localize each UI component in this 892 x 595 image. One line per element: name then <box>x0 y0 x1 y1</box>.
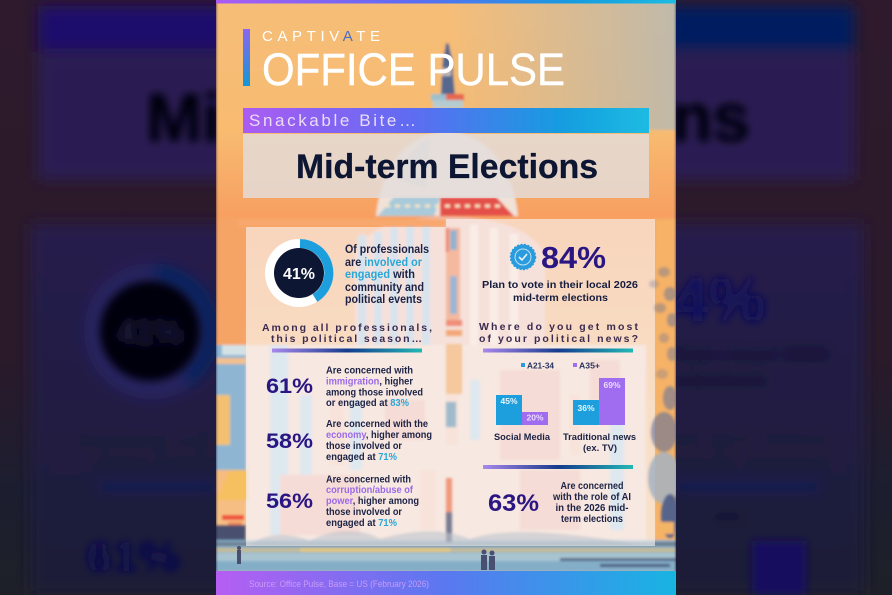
blurred dark backdrop: Mid-term Elections <box>146 80 750 156</box>
title box <box>243 134 649 198</box>
stat 56% corruption: corruption/abuse of <box>326 485 414 496</box>
stat 63% AI: in the 2026 mid- <box>556 503 628 514</box>
translucent content panel <box>246 219 655 546</box>
bar chart: political news sources <box>494 378 636 454</box>
stat 58% economy <box>266 419 432 463</box>
poster <box>216 0 680 595</box>
tree <box>648 267 680 538</box>
stat 58% economy: those involved or <box>326 441 402 452</box>
snackable banner <box>243 108 649 133</box>
stat 56% corruption: power, higher among <box>326 496 419 507</box>
left side building <box>216 345 246 470</box>
divider left <box>272 348 422 352</box>
stat 56% corruption: 56% <box>266 490 313 513</box>
stat 63% AI: Are concerned <box>560 481 624 492</box>
logo <box>243 29 564 86</box>
blurred dark backdrop: 41% <box>118 314 182 350</box>
stat 84% vote: mid-term elections <box>513 292 608 304</box>
footer band <box>216 571 676 595</box>
social media bars <box>496 395 548 425</box>
divider lower right <box>483 465 633 469</box>
traditional news bars: 36% <box>577 403 595 413</box>
lower dome colonnade <box>355 217 545 345</box>
stat 58% economy: 58% <box>266 430 313 453</box>
involved or engaged text: Of professionals <box>345 244 429 256</box>
heading: political news <box>479 322 638 344</box>
involved or engaged text <box>345 244 429 306</box>
chart legend: A21-34 <box>527 362 555 370</box>
main lower building <box>246 345 646 545</box>
chart category labels <box>494 434 636 453</box>
involved or engaged text: political events <box>345 294 422 306</box>
stat 61% immigration <box>266 366 423 409</box>
stat 61% immigration: among those involved <box>326 388 423 398</box>
dome drum bands <box>378 197 514 216</box>
stat 56% corruption: engaged at 71% <box>326 518 397 529</box>
stat 58% economy: Are concerned with the <box>326 419 428 430</box>
people silhouettes <box>237 546 495 570</box>
chart legend: A35+ <box>579 362 600 370</box>
blurred dark backdrop: this political season… <box>96 451 398 474</box>
involved or engaged text: engaged with <box>345 269 415 281</box>
blurred dark backdrop: mid-term elections <box>580 369 770 392</box>
blurred dark backdrop: 61% <box>86 533 180 580</box>
stat 61% immigration: 61% <box>266 375 313 398</box>
heading: among all professionals: Among all professionals, <box>262 322 432 334</box>
stat 56% corruption: those involved or <box>326 507 402 518</box>
stat 63% AI: 63% <box>488 490 539 517</box>
stat 56% corruption <box>266 474 419 529</box>
logo: CAPTIV A TE <box>262 28 380 45</box>
stat 61% immigration: immigration, higher <box>326 376 413 388</box>
social media bars: 45% <box>500 396 518 406</box>
stat 61% immigration: Are concerned with <box>326 366 413 376</box>
heading: political news: of your political news? <box>479 333 638 345</box>
involved or engaged text: are involved or <box>345 257 422 269</box>
dome <box>376 132 518 216</box>
capitol details showing through panel <box>250 228 640 545</box>
blurred dark backdrop: Where do you get most <box>512 427 830 450</box>
stat 63% AI <box>488 481 631 525</box>
statue and tholos <box>431 43 464 108</box>
social media bars: 20% <box>526 412 544 422</box>
stat 58% economy: engaged at 71% <box>326 452 397 463</box>
right wall <box>655 219 676 549</box>
donut 41% <box>265 239 333 307</box>
stat 84% vote: 84% <box>541 240 606 275</box>
poster background: capitol illustration <box>216 0 676 595</box>
donut 41%: 41% <box>283 266 315 283</box>
traditional news bars <box>573 378 625 425</box>
left orange wall and right wall bands <box>216 292 246 345</box>
snackable banner: Snackable Bite… <box>249 111 416 130</box>
stat 58% economy: economy, higher among <box>326 430 432 441</box>
involved or engaged text: community and <box>345 282 424 294</box>
blurred dark backdrop: Plan to vote in their local 2026 <box>518 343 830 366</box>
stat 61% immigration: or engaged at 83% <box>326 398 409 409</box>
source note: Source: Office Pulse, Base = US (February 2026) <box>249 579 429 590</box>
stat 63% AI: term elections <box>561 514 623 525</box>
title box: Mid-term Elections <box>296 148 598 186</box>
blurred dark backdrop: Among all professionals, <box>78 429 418 452</box>
chart category labels: Social Media <box>494 432 551 443</box>
blurred dark backdrop: of your political news? <box>512 451 830 474</box>
traditional news bars: 69% <box>603 380 621 390</box>
stat 63% AI: with the role of AI <box>552 492 631 503</box>
heading: political news: Where do you get most <box>479 321 638 333</box>
heading: among all professionals: this political season… <box>271 333 422 345</box>
stat 56% corruption: Are concerned with <box>326 474 411 486</box>
heading: among all professionals <box>262 324 432 344</box>
divider right <box>483 348 633 352</box>
stat 84% vote: Plan to vote in their local 2026 <box>482 279 638 291</box>
stat 84% vote <box>482 246 638 301</box>
blurred dark backdrop: A35+ <box>712 509 751 526</box>
chart legend <box>521 362 600 368</box>
top gradient strip <box>216 0 676 4</box>
icon: verified badge <box>510 244 536 270</box>
chart category labels: (ex. TV) <box>583 443 617 454</box>
ground <box>216 540 676 572</box>
logo: OFFICE PULSE <box>262 44 565 95</box>
blurred dark backdrop: 84% <box>636 266 766 335</box>
chart category labels: Traditional news <box>563 432 636 443</box>
